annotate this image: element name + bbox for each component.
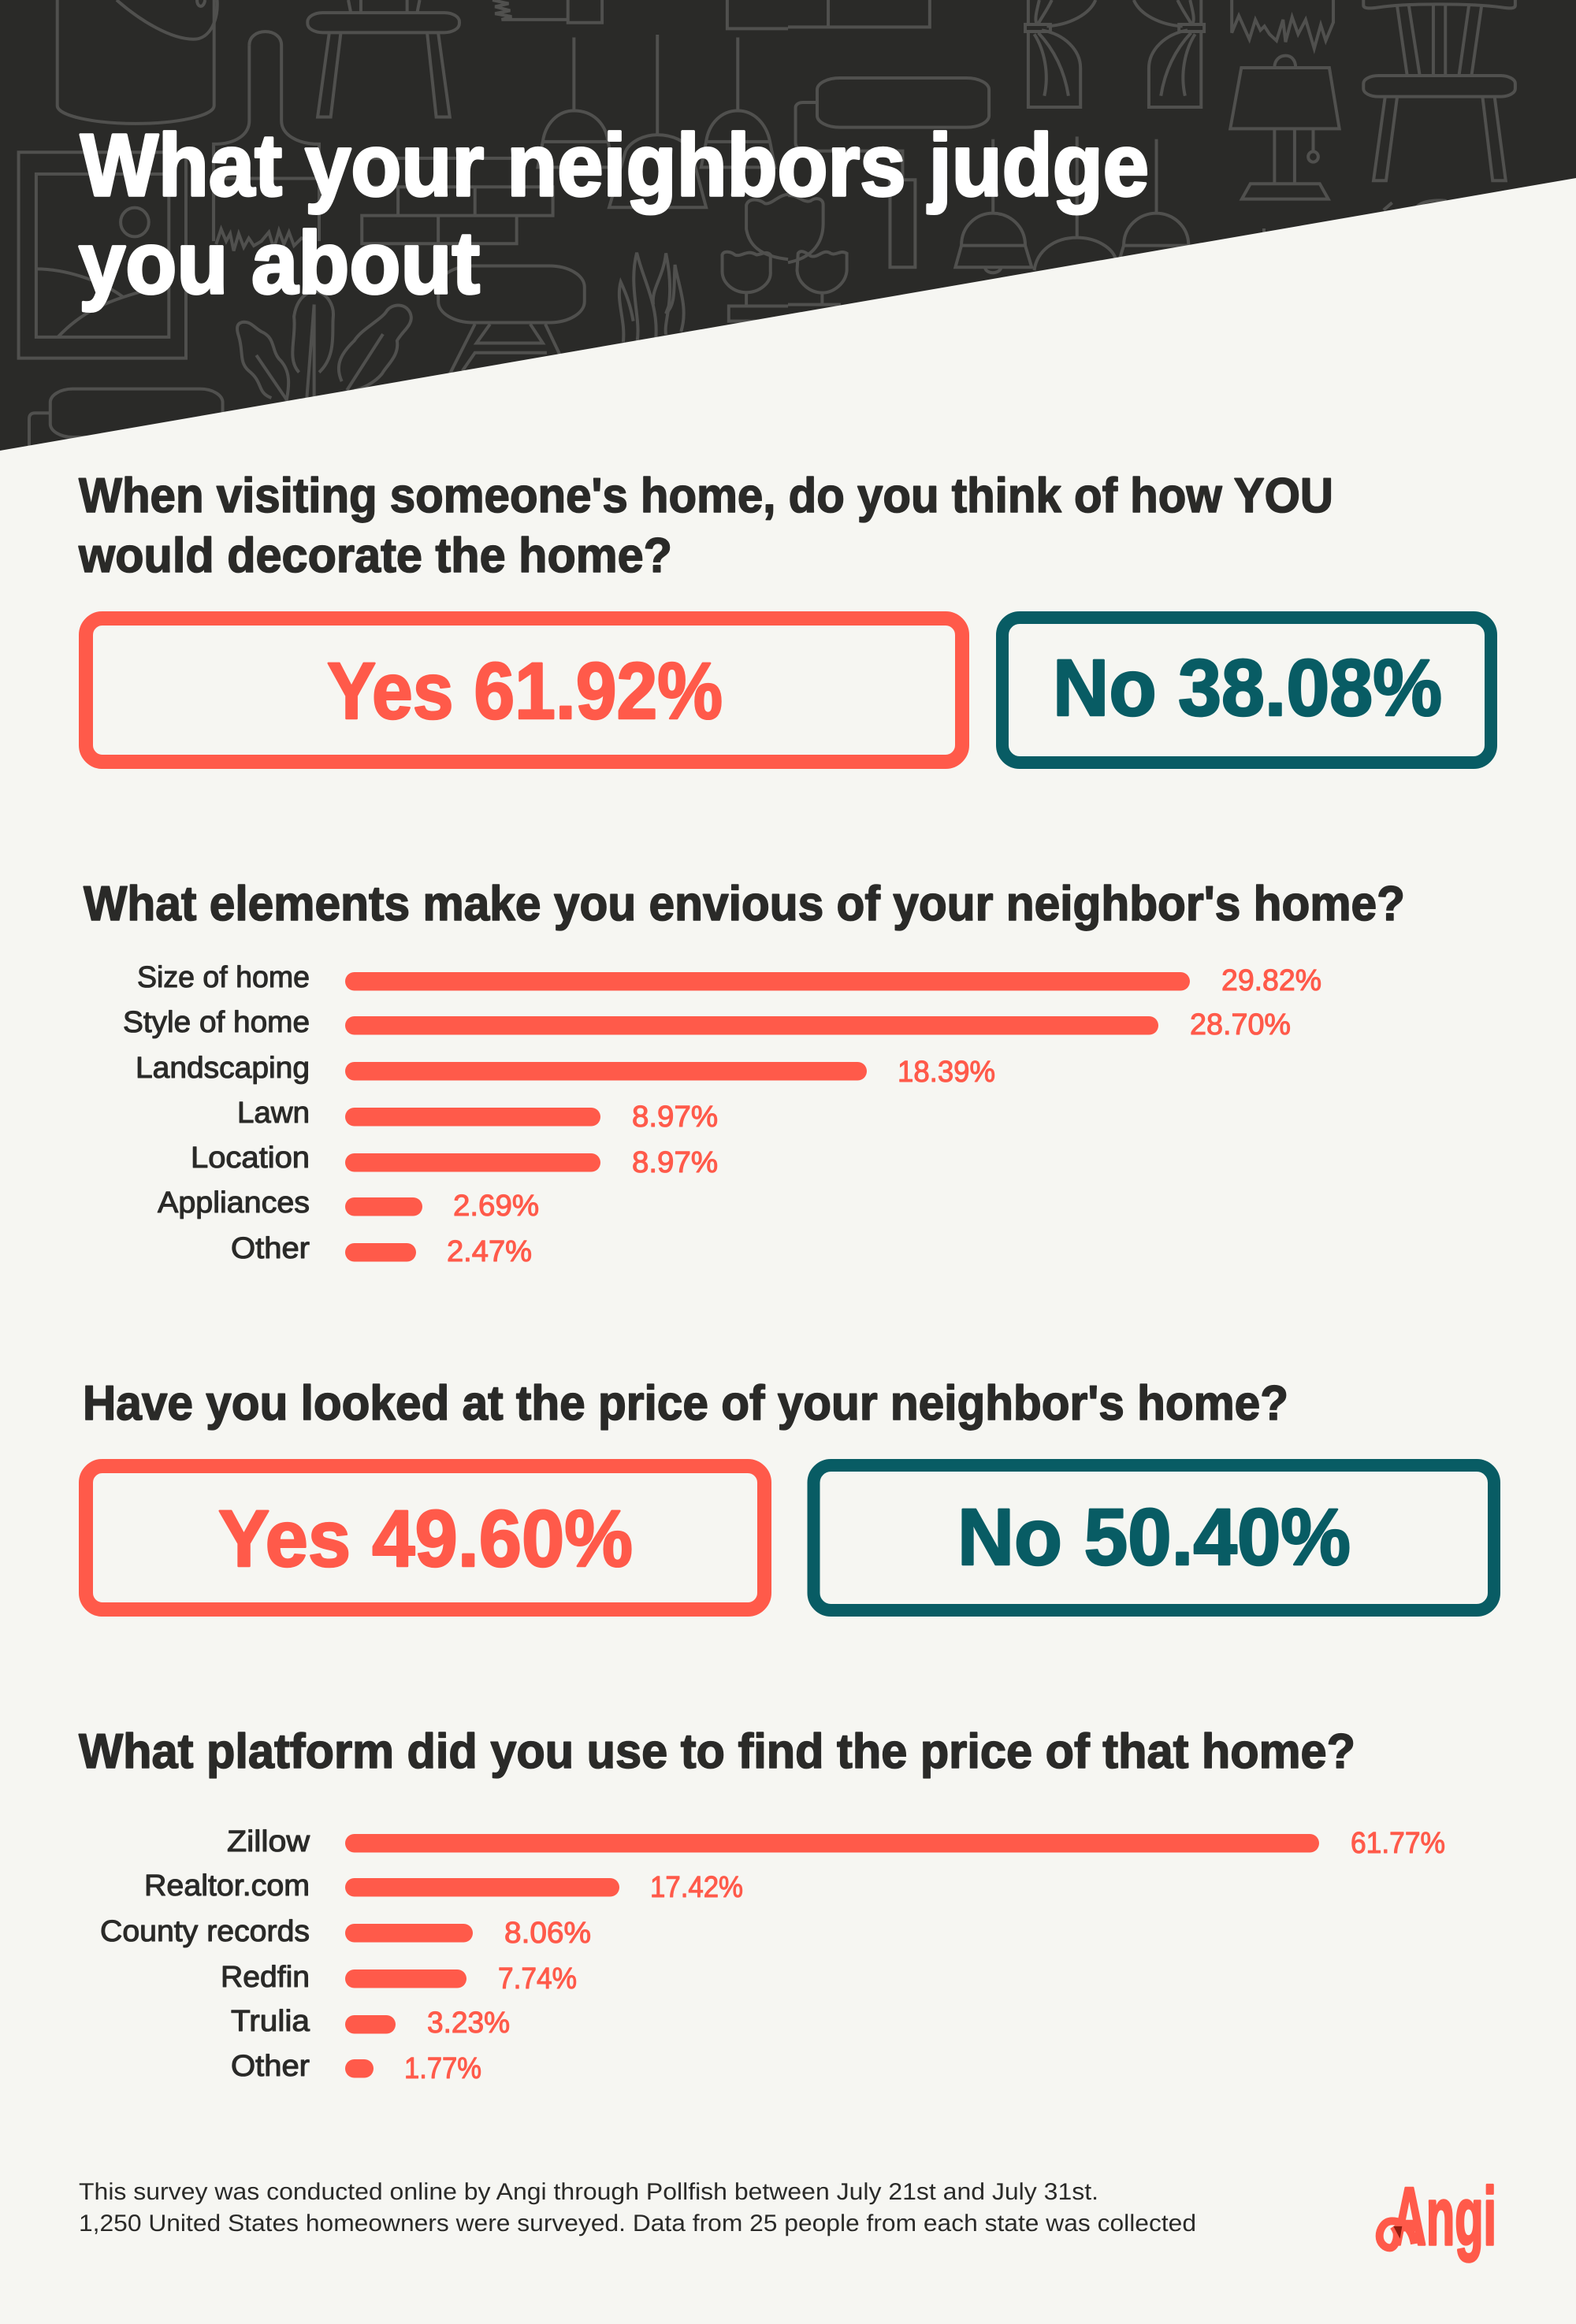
answer box: yes 49.60%: Yes 49.60%: [218, 1494, 633, 1583]
row: appliances: Appliances: [158, 1186, 310, 1220]
row: lawn: [237, 1097, 718, 1134]
row: realtor.com: [144, 1869, 743, 1904]
row: redfin: 7.74%: [498, 1962, 577, 1995]
row: zillow: 61.77%: [1351, 1827, 1445, 1860]
row: size of home: [137, 961, 1321, 997]
row: county records: 8.06%: [504, 1917, 591, 1950]
row: appliances: 2.69%: [453, 1190, 539, 1223]
row: style of home: Style of home: [123, 1006, 310, 1039]
answer box: yes 49.60%: [86, 1466, 764, 1609]
row: lawn: Lawn: [237, 1097, 310, 1130]
row: landscaping: Landscaping: [136, 1052, 310, 1085]
footnote: [79, 2179, 1196, 2237]
row: zillow: [227, 1825, 1445, 1860]
answer box: no 50.40%: [813, 1465, 1494, 1610]
row: realtor.com: 17.42%: [650, 1871, 743, 1904]
row: lawn: 8.97%: [632, 1101, 718, 1134]
row: trulia: Trulia: [231, 2005, 310, 2038]
title: [79, 116, 1149, 312]
title: What your neighbors judge: [80, 116, 1149, 214]
row: realtor.com: Realtor.com: [144, 1869, 310, 1903]
row: zillow: Zillow: [227, 1825, 310, 1858]
row: location: [191, 1142, 718, 1179]
row: other: Other: [231, 1232, 310, 1265]
row: style of home: 28.70%: [1190, 1008, 1291, 1041]
row: size of home: 29.82%: [1221, 964, 1321, 997]
answer box: no 38.08%: [1002, 618, 1491, 763]
row: location: 8.97%: [632, 1146, 718, 1179]
row: other: [231, 1232, 532, 1268]
question 2 heading: What elements make you envious of your neighbor's home?: [84, 877, 1405, 931]
footnote: This survey was conducted online by Angi through Pollfish between July 21st and July 31st.: [79, 2179, 1098, 2205]
answer box: no 50.40%: No 50.40%: [957, 1492, 1351, 1582]
logo: Angi: [1380, 2171, 1496, 2263]
question 3 heading: Have you looked at the price of your neighbor's home?: [83, 1376, 1288, 1431]
row: trulia: 3.23%: [427, 2007, 510, 2040]
header: dark banner with line-art pattern: [0, 0, 1576, 457]
row: appliances: [158, 1186, 539, 1223]
row: trulia: [231, 2005, 510, 2040]
row: redfin: Redfin: [221, 1961, 310, 1994]
row: other: 1.77%: [404, 2052, 481, 2085]
row: location: Location: [191, 1142, 310, 1175]
title: you about: [79, 213, 480, 312]
question 4 heading: What platform did you use to find the price of that home?: [79, 1724, 1355, 1779]
row: other: [231, 2050, 481, 2085]
bar chart: platforms: [100, 1825, 1445, 2085]
question 1 heading: would decorate the home?: [78, 529, 672, 583]
bar chart: envy elements: [123, 961, 1321, 1268]
answer box: no 38.08%: No 38.08%: [1053, 643, 1442, 733]
answer box: yes 61.92%: [86, 618, 962, 762]
row: size of home: Size of home: [137, 961, 310, 994]
question 1 heading: [78, 469, 1333, 583]
logo: Angi: Angi: [1392, 2171, 1496, 2263]
row: landscaping: 18.39%: [898, 1056, 995, 1089]
row: style of home: [123, 1006, 1291, 1041]
row: landscaping: [136, 1052, 995, 1089]
row: county records: County records: [100, 1915, 310, 1948]
row: redfin: [221, 1961, 577, 1995]
row: other: Other: [231, 2050, 310, 2083]
answer box: yes 61.92%: Yes 61.92%: [327, 646, 723, 736]
row: other: 2.47%: [447, 1235, 532, 1268]
question 1 heading: When visiting someone's home, do you think of how YOU: [79, 469, 1333, 523]
row: county records: [100, 1915, 591, 1950]
footnote: 1,250 United States homeowners were surveyed. Data from 25 people from each state was collected: [79, 2211, 1196, 2237]
